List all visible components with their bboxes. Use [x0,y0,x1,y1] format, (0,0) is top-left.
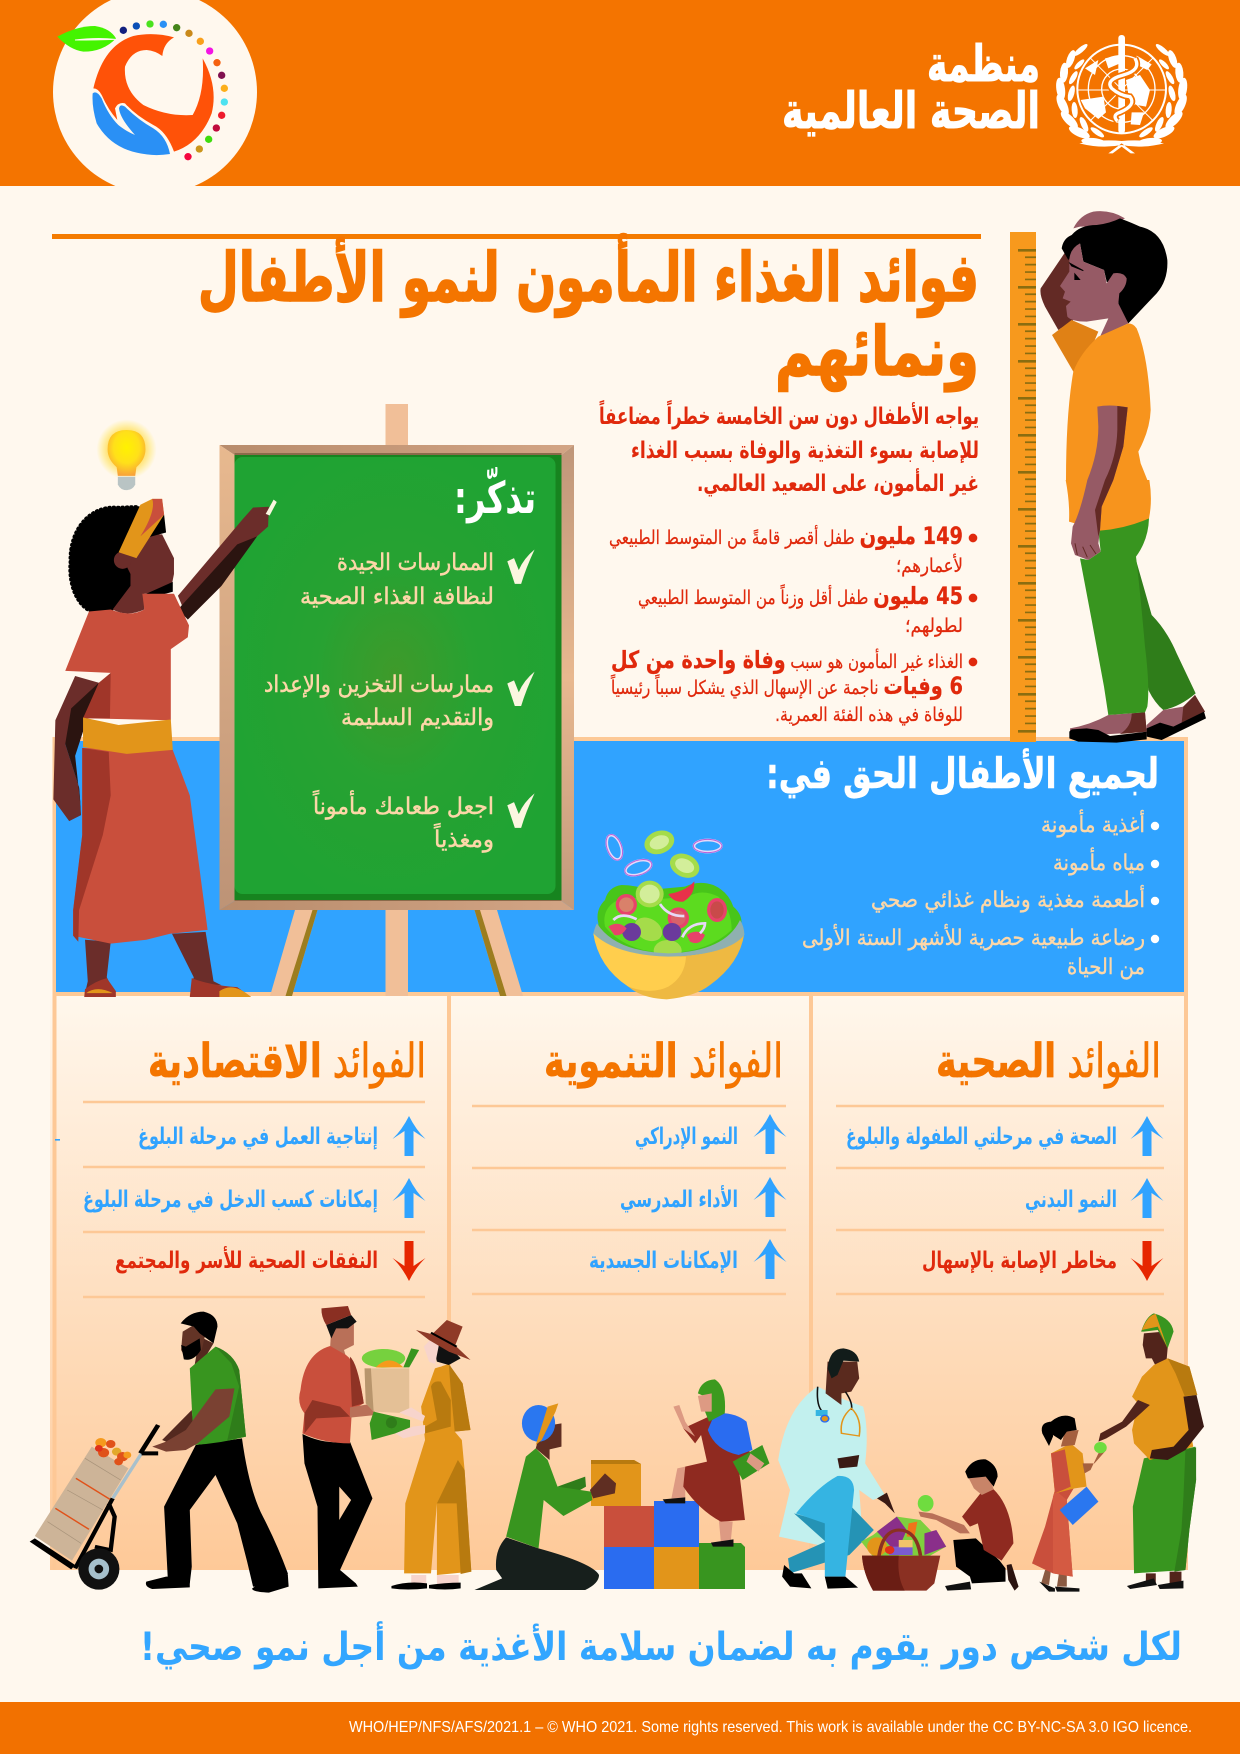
illustration: people left group [30,1306,616,1593]
heading: الفوائد الصحية [936,1034,1161,1089]
items: الأداء المدرسي [620,1184,738,1213]
statistics bullet list: لأعمارهم؛ [896,554,963,577]
checklist: ومغذياً [433,823,494,853]
statistics bullet list: 6 وفيات ناجمة عن الإسهال الذي يشكل سبباً رئيسياً [611,672,963,700]
grocery bag and money [362,1348,419,1440]
person: woman with hat [391,1320,471,1589]
items [83,1124,378,1274]
WHO name text: منظمة [927,35,1040,93]
checklist: ممارسات التخزين والإعداد [264,672,494,698]
icon: WHO emblem [1054,35,1189,153]
items [846,1124,1117,1274]
statistics bullet list: الغذاء غير المأمون هو سبب وفاة واحدة من كل [611,646,963,674]
rights list: رضاعة طبيعية حصرية للأشهر الستة الأولى [802,924,1145,951]
person: kneeling woman [474,1403,616,1590]
arrows [392,1116,426,1281]
title [198,233,979,392]
illustration: people right group [663,1313,1204,1592]
items: النمو الإدراكي [635,1124,738,1150]
illustration: easel and chalkboard [220,404,574,996]
heading: الفوائد الاقتصادية [148,1034,426,1089]
arrows [1130,1116,1164,1281]
rights list: من الحياة [1067,955,1145,980]
arrows [754,1114,786,1279]
intro paragraph [599,400,979,497]
column: economic benefits [55,1034,426,1297]
checklist [264,549,535,853]
items: إمكانات كسب الدخل في مرحلة البلوغ [83,1187,378,1213]
illustration: teacher with light bulb [53,419,277,997]
person: girl with backpack [663,1379,769,1547]
checklist: لنظافة الغذاء الصحية [300,584,494,610]
statistics bullet list: للوفاة في هذه الفئة العمرية. [775,704,963,726]
items: النمو البدني [1025,1187,1117,1213]
panel: benefits background [50,996,1188,1570]
WHO name text: الصحة العالمية [782,82,1040,140]
items: النفقات الصحية للأسر والمجتمع [115,1245,378,1274]
items: مخاطر الإصابة بالإسهال [922,1248,1117,1274]
illustration: salad bowl [593,826,744,999]
items: إنتاجية العمل في مرحلة البلوغ [138,1124,378,1150]
ruler [1010,232,1036,742]
rights list: أغذية مأمونة [1041,809,1145,838]
intro paragraph: غير المأمون، على الصعيد العالمي. [697,467,979,497]
checklist: والتقديم السليمة [341,705,494,731]
person: girl with book [1032,1416,1107,1592]
items: الإمكانات الجسدية [589,1248,738,1274]
rights list [802,809,1159,980]
illustration: boy measuring height [1040,211,1206,743]
statistics bullet list [609,522,977,726]
teacher hair [70,507,138,613]
column: health benefits [836,1034,1164,1294]
person: kneeling boy with apple [918,1459,1019,1591]
intro paragraph: يواجه الأطفال دون سن الخامسة خطراً مضاعفاً [599,400,979,430]
checklist: الممارسات الجيدة [337,550,494,576]
chalkboard frame [220,445,574,910]
hand truck with crates [30,1425,158,1590]
panel: children's rights [52,737,1188,996]
title rule [52,234,981,239]
illustration: toy blocks [591,1460,745,1589]
board heading: تذكّر: [454,467,536,524]
heading: الفوائد التنموية [544,1034,783,1089]
items [589,1124,738,1274]
easel post and legs [270,404,523,996]
icon: food safety logo [53,0,257,194]
rights list: أطعمة مغذية ونظام غذائي صحي [871,885,1145,913]
column: developmental benefits [472,1034,786,1294]
rights list: مياه مأمونة [1053,847,1145,876]
person: pregnant mother [1098,1313,1204,1589]
statistics bullet list: 149 مليون طفل أقصر قامةً من المتوسط الطبيعي [609,522,963,550]
icon: light bulb [96,419,157,490]
statistics bullet list: لطولهم؛ [905,615,963,637]
intro paragraph: للإصابة بسوء التغذية والوفاة بسبب الغذاء [631,438,979,464]
items: الصحة في مرحلتي الطفولة والبلوغ [846,1124,1117,1150]
checklist: اجعل طعامك مأموناً [312,790,494,820]
person: doctor [778,1348,895,1589]
statistics bullet list: 45 مليون طفل أقل وزناً من المتوسط الطبيعي [638,582,963,610]
WHO name text [782,35,1040,140]
title: ونمائهم [775,313,979,392]
footer band [0,1702,1240,1754]
vegetable basket [861,1517,946,1591]
person: man with fez [299,1306,376,1588]
person: man pushing trolley [146,1312,289,1593]
header band [0,0,1240,194]
